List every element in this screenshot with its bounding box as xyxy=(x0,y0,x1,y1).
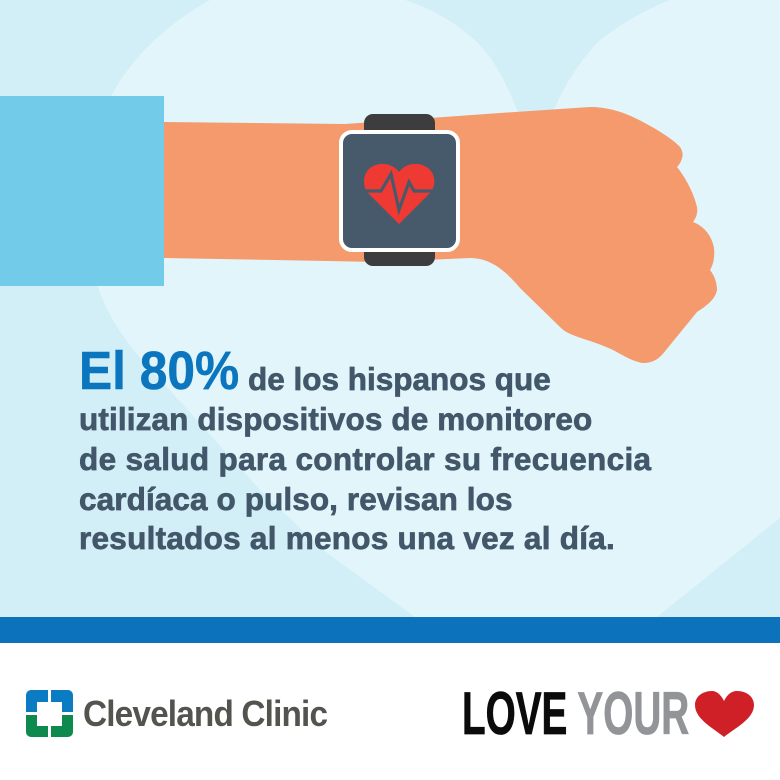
blue footer stripe xyxy=(0,617,780,643)
main statistic text: utilizan dispositivos de monitoreo xyxy=(79,401,592,437)
sleeve xyxy=(0,96,164,286)
Love Your wordmark: LOVE YOUR xyxy=(462,680,689,747)
watch strap top xyxy=(364,114,435,144)
main statistic text xyxy=(79,341,652,556)
background panel xyxy=(0,0,780,617)
watch strap bottom xyxy=(364,236,435,266)
Cleveland Clinic wordmark: Cleveland Clinic xyxy=(83,693,327,734)
large background hearts xyxy=(93,0,780,617)
main statistic text: de salud para controlar su frecuencia xyxy=(79,441,651,477)
icon: red heart xyxy=(695,691,754,737)
highlighted figure: El 80% xyxy=(79,341,239,401)
main statistic text: de los hispanos que xyxy=(248,361,551,397)
watch face xyxy=(341,132,458,250)
main statistic text: resultados al menos una vez al día. xyxy=(79,520,615,556)
Cleveland Clinic logo mark xyxy=(26,690,73,737)
arm and fist xyxy=(164,107,717,363)
main statistic text: cardíaca o pulso, revisan los xyxy=(79,481,513,517)
icon: heart with pulse line xyxy=(362,164,436,224)
watch xyxy=(341,114,458,266)
